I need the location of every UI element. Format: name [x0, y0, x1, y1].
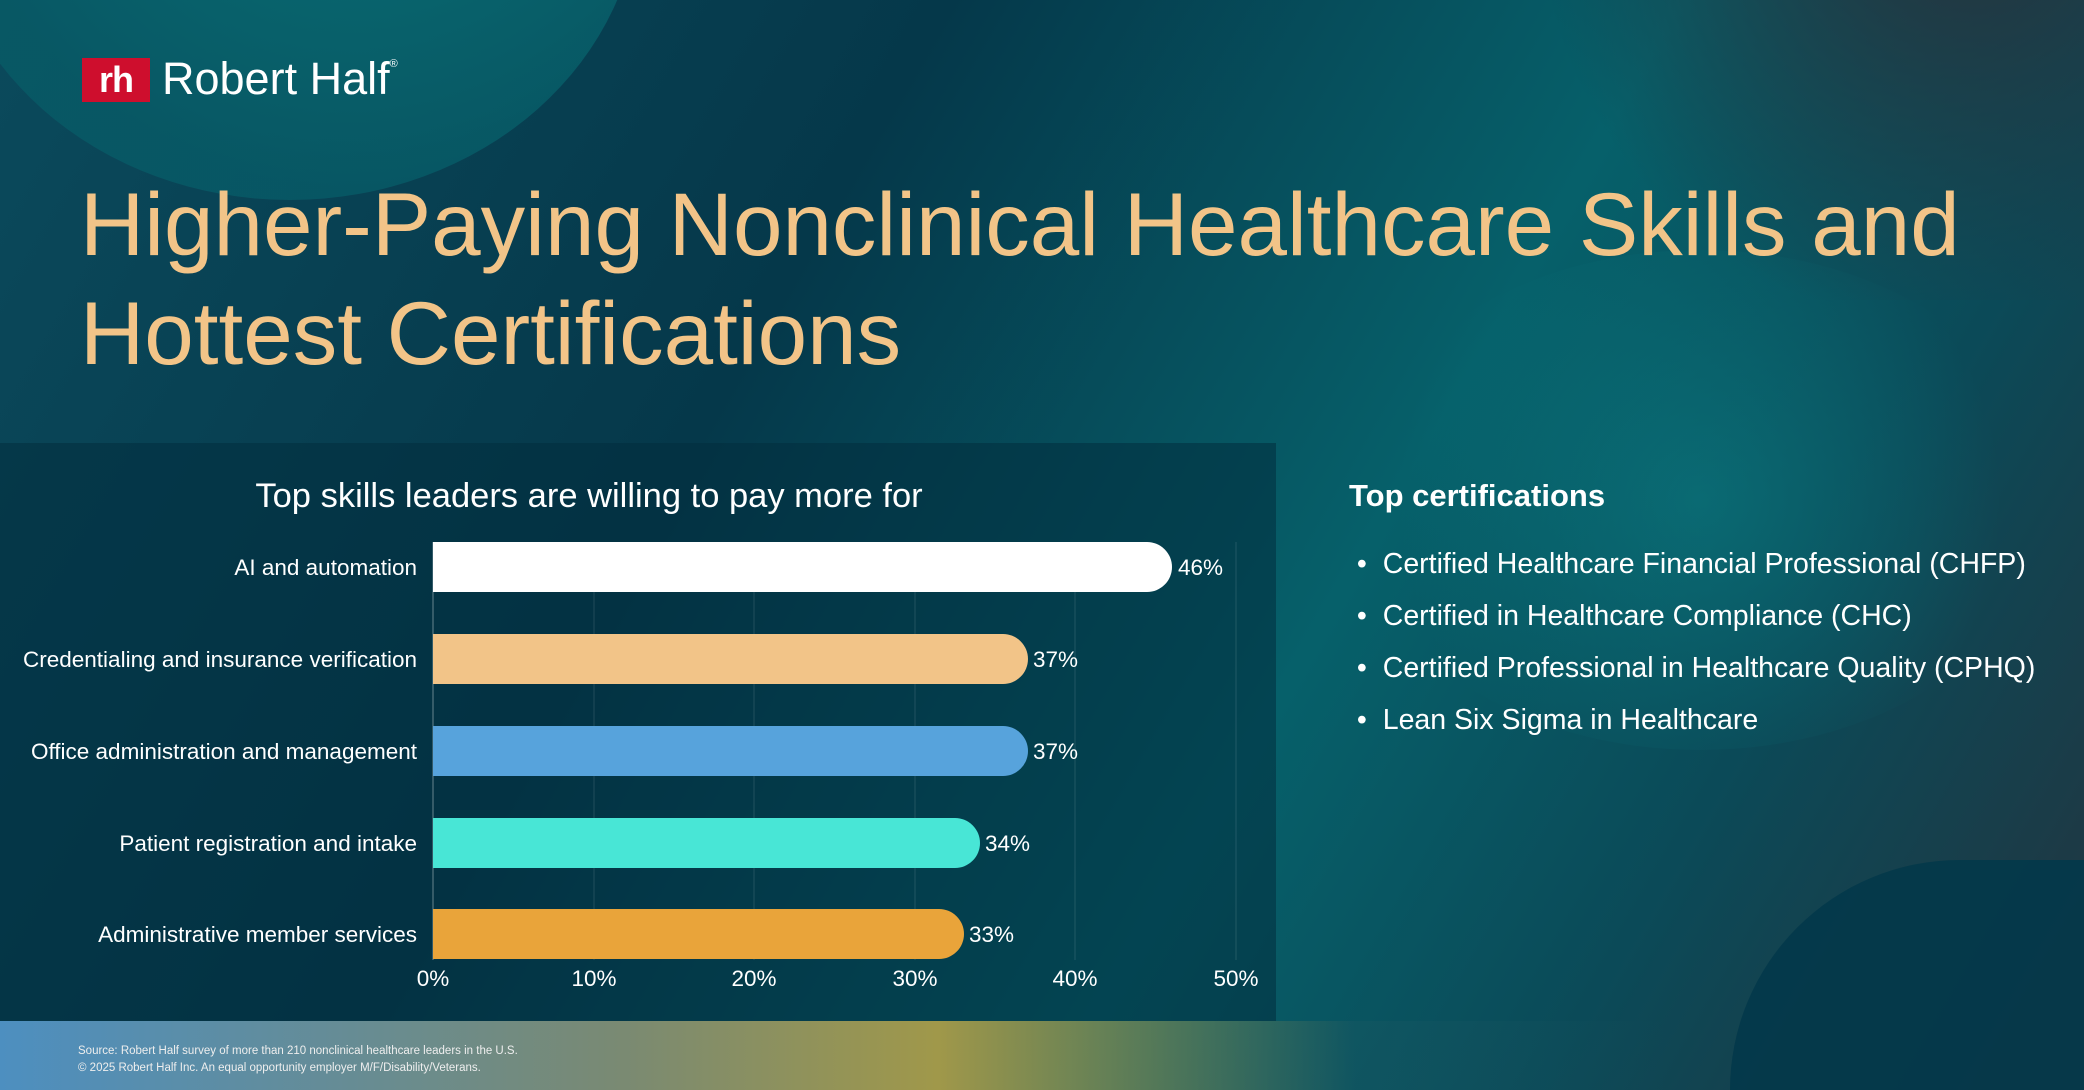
bar chart: Credentialing and insurance verification [23, 647, 417, 672]
bar chart: 20% [731, 966, 777, 991]
certification list: • Certified Healthcare Financial Professional (CHFP) [1357, 548, 2026, 580]
bar chart: 46% [1178, 555, 1223, 580]
bar chart: 40% [1052, 966, 1098, 991]
panel: chart [0, 443, 1276, 1021]
certification list [1357, 548, 2035, 736]
bar chart: Office administration and management [31, 739, 418, 764]
panel: certifications [1349, 478, 2035, 736]
bar chart: Administrative member services [98, 922, 417, 947]
bar chart: 37% [1033, 647, 1078, 672]
bar chart: 33% [969, 922, 1014, 947]
bar chart: 34% [985, 831, 1030, 856]
bar chart: AI and automation [234, 555, 417, 580]
bar chart [23, 542, 1259, 991]
certification list: • Certified in Healthcare Compliance (CHC) [1357, 600, 1912, 632]
bar chart: Patient registration and intake [119, 831, 417, 856]
footer source text: Source: Robert Half survey of more than 210 nonclinical healthcare leaders in the U.S. [78, 1045, 518, 1057]
chart title: Top skills leaders are willing to pay more for [255, 477, 923, 515]
certification list: • Certified Professional in Healthcare Quality (CPHQ) [1357, 652, 2035, 684]
logo: rh [99, 59, 133, 100]
bar chart: 0% [417, 966, 449, 991]
bar chart: 37% [1033, 739, 1078, 764]
footer source text [78, 1045, 518, 1074]
bar chart: 10% [571, 966, 617, 991]
bar chart: 50% [1213, 966, 1259, 991]
title: Hottest Certifications [80, 283, 901, 383]
title: Higher-Paying Nonclinical Healthcare Skills and [80, 174, 1960, 274]
footer strip [0, 1021, 2084, 1090]
certification list: • Lean Six Sigma in Healthcare [1357, 704, 1758, 736]
title [80, 174, 1960, 383]
bar chart: 30% [892, 966, 938, 991]
footer source text: © 2025 Robert Half Inc. An equal opportunity employer M/F/Disability/Veterans. [78, 1062, 481, 1074]
certifications heading: Top certifications [1349, 478, 1605, 513]
